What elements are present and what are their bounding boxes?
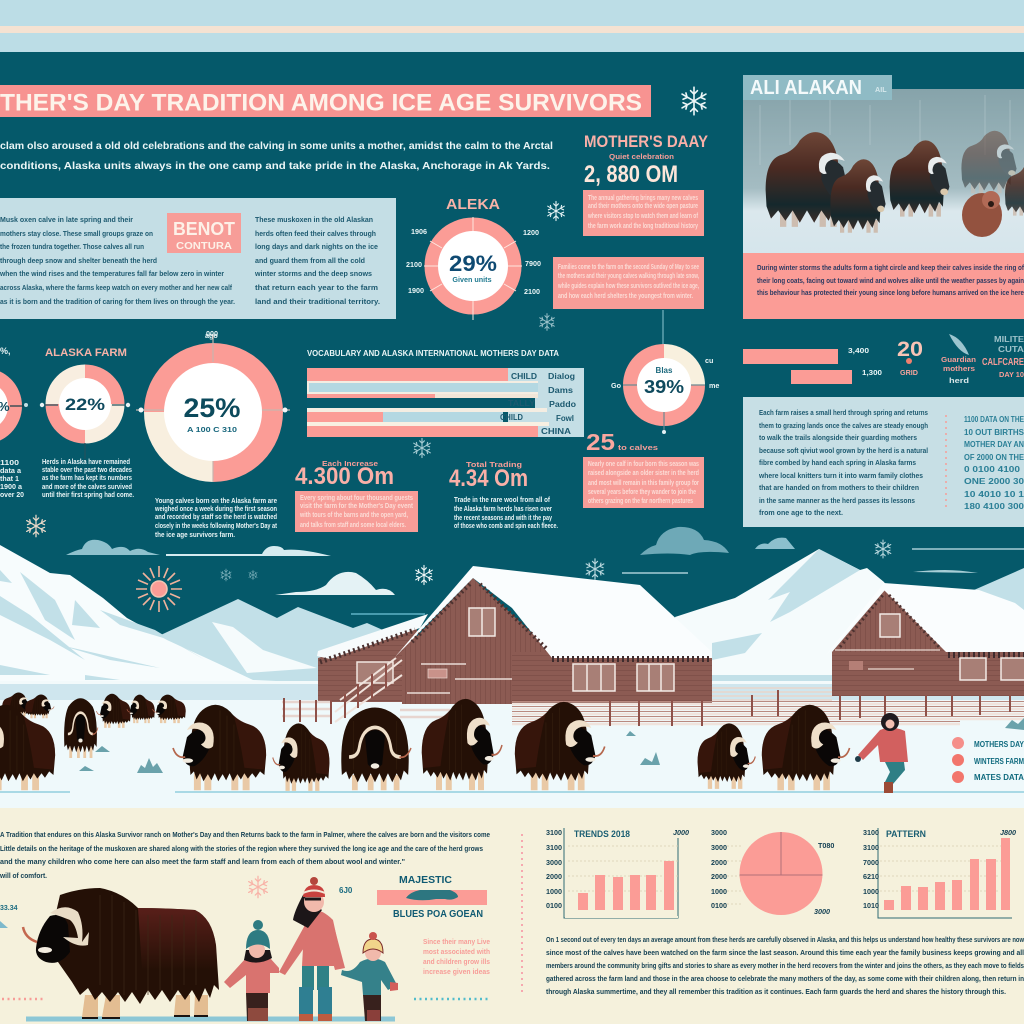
bar chart: horizontal: Dialog bbox=[548, 372, 575, 381]
bar chart: left: 0100 bbox=[546, 901, 562, 910]
shadows bbox=[0, 791, 1024, 793]
donut: Alaska Farm 22%: 22% bbox=[65, 395, 105, 414]
photo caption bbox=[743, 253, 1024, 319]
label: 33.34 bbox=[0, 905, 18, 912]
bottom intro text: A Tradition that endures on this Alaska Survivor ranch on Mother's Day and then Returns back to the farm in Palmer, where the calves are born and the visitors come bbox=[0, 830, 490, 839]
bar chart: right: 1000 bbox=[863, 887, 879, 896]
bar chart: right: 7000 bbox=[863, 858, 879, 867]
feature text: CUTA bbox=[998, 345, 1024, 354]
bar pair bbox=[743, 346, 882, 384]
panel: text with badge bbox=[0, 198, 396, 319]
stat: Mother's Day: 2, 880 OM bbox=[584, 161, 678, 188]
pie chart: T080 bbox=[818, 841, 834, 850]
bar chart: horizontal: CHILD bbox=[500, 413, 523, 422]
donut: partial left: 1100 bbox=[0, 458, 19, 467]
donut: Alaska 29%: ALEKA bbox=[446, 196, 500, 213]
callout box: with tours of the barns and the open yard, bbox=[299, 510, 408, 519]
icon: snowflake bbox=[27, 515, 45, 537]
photo title tab: AIL bbox=[875, 85, 887, 94]
top band bbox=[0, 0, 1024, 52]
panel: long text right: 10 4010 10 1 bbox=[964, 490, 1024, 499]
left column text: as it is born and the tradition of caring for them lives on through the year. bbox=[0, 297, 235, 306]
donut: Alaska 29%: 1200 bbox=[523, 228, 539, 237]
pink text: and children grow ills bbox=[423, 957, 490, 966]
pie chart: 1000 bbox=[711, 887, 727, 896]
icon: snowflake bbox=[586, 559, 604, 579]
stat: 4.34 Om: Total Trading bbox=[466, 460, 522, 469]
donut: partial left: 1900 a bbox=[0, 482, 23, 491]
callout box: the farm work and the long traditional history bbox=[588, 221, 698, 230]
window bbox=[469, 608, 674, 691]
right column text: herds often feed their calves through bbox=[255, 229, 376, 238]
donut: Alaska 29% bbox=[406, 196, 541, 320]
panel: long text right: from one age to the next. bbox=[759, 508, 843, 517]
panel: long text right: Each farm raises a small herd through spring and returns bbox=[759, 408, 928, 417]
mother bbox=[279, 877, 345, 1021]
bottom intro text: and the many children who come here can also meet the farm staff and learn from each of them about wool and winter." bbox=[0, 857, 405, 866]
feature text: MILITE bbox=[994, 335, 1024, 344]
intro text bbox=[0, 141, 553, 172]
pie chart: 0100 bbox=[711, 901, 727, 910]
pink text: most associated with bbox=[423, 947, 490, 956]
text block: Herds in Alaska have remained bbox=[42, 457, 130, 466]
callout: Majestic bbox=[377, 875, 487, 920]
panel: long text right: 10 OUT BIRTHS bbox=[964, 428, 1024, 437]
donut: 39%: cu bbox=[705, 356, 713, 365]
pie chart: 3000 bbox=[711, 843, 727, 852]
mountains bbox=[0, 545, 1024, 701]
bar chart: right: 6210 bbox=[863, 872, 879, 881]
bar chart: right: PATTERN bbox=[886, 829, 926, 839]
donut: Alaska 29%: 29% bbox=[449, 251, 497, 276]
feature text bbox=[982, 335, 1024, 379]
text block: Young calves born on the Alaska farm are bbox=[155, 496, 277, 505]
bar chart: left: 3000 bbox=[546, 858, 562, 867]
scale dots teal bbox=[414, 998, 490, 1000]
left column text: Musk oxen calve in late spring and their bbox=[0, 215, 133, 224]
pie chart: 3000 bbox=[814, 907, 830, 916]
bar chart: left: J000 bbox=[673, 828, 689, 837]
icon: snowflake bbox=[249, 876, 267, 898]
right column text: winter storms and the deep snows bbox=[254, 269, 372, 278]
stat: 25 bbox=[586, 429, 658, 455]
stat: 25: to calves bbox=[618, 445, 658, 452]
stat: Mother's Day bbox=[584, 132, 709, 188]
callout box: Every spring about four thousand guests bbox=[300, 493, 413, 502]
snow ground bbox=[0, 700, 1024, 808]
badge bbox=[167, 213, 241, 253]
donut: partial left: that 1 bbox=[0, 474, 19, 483]
stat: 20 bbox=[897, 338, 923, 377]
text block: the recent seasons and with it the pay bbox=[454, 513, 552, 522]
panel: bottom bbox=[0, 808, 1024, 1024]
callout box: where visitors stop to watch them and learn of bbox=[587, 211, 698, 220]
icon: snowflake bbox=[540, 314, 554, 330]
callout box bbox=[583, 457, 704, 508]
left column text: mothers stay close. These small groups graze on bbox=[0, 229, 153, 238]
callout box: the mothers and their young calves walking through late snow, bbox=[558, 271, 699, 280]
bar chart: left: 3100 bbox=[546, 843, 562, 852]
text block bbox=[42, 457, 134, 499]
pink text bbox=[423, 937, 490, 976]
staircase bbox=[335, 658, 402, 722]
herd: foreground oxen bbox=[0, 699, 1024, 792]
panel: long text right: ONE 2000 30 bbox=[964, 477, 1024, 486]
roof bbox=[395, 566, 712, 658]
bottom intro text bbox=[0, 830, 490, 880]
bar chart: left: 1000 bbox=[546, 887, 562, 896]
callout box: and how each herd shelters the youngest from winter. bbox=[558, 291, 693, 300]
photo bbox=[743, 89, 1024, 254]
right column text bbox=[254, 215, 380, 306]
icon: snowflake bbox=[416, 565, 432, 585]
icon: snowflake bbox=[875, 540, 891, 558]
bar chart: left: 2000 bbox=[546, 872, 562, 881]
callout box: visit the farm for the Mother's Day event bbox=[300, 501, 413, 510]
photo title tab: ALI ALAKAN bbox=[750, 77, 862, 99]
donut: Alaska 29%: 2100 bbox=[406, 260, 422, 269]
right column text: and guard them from all the cold bbox=[255, 256, 365, 265]
donut: Alaska Farm 22%: ALASKA FARM bbox=[45, 347, 127, 359]
callout box: The annual gathering brings many new calves bbox=[588, 193, 698, 202]
stat: Mother's Day: Quiet celebration bbox=[609, 152, 674, 161]
donut: 39% bbox=[611, 310, 719, 434]
bar chart: left: TRENDS 2018 bbox=[574, 829, 630, 839]
panel: long text right: in the same manner as the herd passes its lessons bbox=[759, 496, 915, 505]
mountain left bbox=[0, 545, 320, 686]
donut: Alaska 29%: 1900 bbox=[408, 286, 424, 295]
donut: 25%: 000 bbox=[206, 329, 218, 338]
stat: 4.30 Om: Each Increase bbox=[322, 459, 378, 468]
label: ago bbox=[205, 331, 218, 340]
stat: 4.30 Om: 4.300 Om bbox=[295, 463, 394, 490]
feature text: DAY 10 bbox=[999, 372, 1024, 379]
pink text: Since their many Live bbox=[423, 937, 490, 946]
icon: snowflake bbox=[249, 570, 257, 580]
child right bbox=[341, 932, 398, 1021]
person in red jacket bbox=[855, 713, 908, 793]
text block: the Alaska farm herds has risen over bbox=[454, 504, 552, 513]
feature text bbox=[941, 355, 976, 385]
bar chart: right: 3100 bbox=[863, 828, 879, 837]
donut: partial left: data a bbox=[0, 466, 22, 475]
text block: weighed once a week during the first season bbox=[154, 504, 277, 513]
pie chart: 2000 bbox=[711, 858, 727, 867]
panel: long text right: them to grazing lands once the calves are steady enough bbox=[759, 421, 928, 430]
intro text: conditions, Alaska units always in the one camp and take pride in the Alaska, Anchorage in Ak Yards. bbox=[0, 161, 550, 172]
callout box: while guides explain how these survivors outlived the ice age, bbox=[557, 281, 699, 290]
left column text: when the wind rises and the temperatures fall far below zero in winter bbox=[0, 269, 224, 278]
text block: stable over the past two decades bbox=[42, 465, 132, 474]
panel: long text right: where local knitters turn it into warm family clothes bbox=[758, 471, 923, 480]
text block: and more of the calves survived bbox=[42, 482, 132, 491]
bar chart: horizontal: CHINA bbox=[541, 427, 571, 436]
donut: partial left bbox=[0, 346, 28, 499]
donut: Alaska Farm 22% bbox=[40, 347, 130, 459]
stat: 20: 20 bbox=[897, 338, 923, 361]
right column text: land and their traditional territory. bbox=[255, 297, 380, 306]
gable bbox=[402, 578, 552, 704]
callout box: others grazing on the far northern pastures bbox=[588, 496, 693, 505]
pie chart: 2000 bbox=[711, 872, 727, 881]
icon: snowflake bbox=[682, 87, 706, 115]
icon: feather bbox=[949, 334, 969, 355]
bar chart: horizontal bbox=[307, 349, 584, 437]
panel: long text right: 180 4100 300 bbox=[964, 502, 1024, 511]
label: 6J0 bbox=[339, 886, 353, 895]
icon: snowflake bbox=[221, 569, 231, 581]
panel: Ali Alakan photo bbox=[743, 75, 1024, 319]
callout box: Families come to the farm on the second Sunday of May to see bbox=[558, 262, 699, 271]
icon: blue triangle bbox=[0, 921, 8, 928]
bar chart: horizontal: Fowl bbox=[556, 414, 574, 423]
left column text: across Alaska, where the farms keep watch on every mother and her new calf bbox=[0, 283, 233, 292]
badge: BENOT bbox=[173, 219, 235, 239]
callout box bbox=[553, 257, 704, 309]
stat: Mother's Day: MOTHER'S DAAY bbox=[584, 132, 709, 151]
donut: Alaska 29%: 1906 bbox=[411, 227, 427, 236]
legend: MATES DATA bbox=[974, 773, 1024, 782]
bar chart: right: 3100 bbox=[863, 843, 879, 852]
stat: 20: GRID bbox=[900, 368, 918, 377]
bar chart: left: 3100 bbox=[546, 828, 562, 837]
donut: partial left: over 20 bbox=[0, 490, 24, 499]
fences bbox=[282, 688, 1024, 726]
callout box bbox=[583, 190, 704, 236]
barn: main bbox=[317, 566, 712, 722]
text block: of those who comb and spin each fleece. bbox=[454, 521, 558, 530]
bar pair: 1,300 bbox=[862, 368, 882, 377]
feature text: herd bbox=[949, 376, 969, 385]
calf bbox=[962, 191, 1002, 237]
mountains behind left bbox=[150, 599, 420, 690]
bar chart: horizontal: Paddo bbox=[549, 400, 576, 409]
bar chart: right: 1010 bbox=[863, 901, 879, 910]
front bbox=[512, 652, 712, 705]
barn: right bbox=[826, 583, 1024, 696]
callout box: and their mothers onto the wide open pasture bbox=[588, 201, 698, 210]
legend bbox=[952, 737, 1024, 783]
family bbox=[224, 877, 398, 1021]
stat: 4.34 Om: 4.34 Om bbox=[449, 465, 528, 492]
donut: partial left: %, bbox=[0, 346, 11, 356]
right column text: These muskoxen in the old Alaskan bbox=[255, 215, 373, 224]
donut: 39%: 39% bbox=[644, 377, 684, 397]
intro text: clam olso aroused a old old celebrations and the calving in some units a mother, amidst the calm to the Arctal bbox=[0, 141, 553, 152]
bar chart: horizontal: TALLY bbox=[508, 399, 536, 408]
bar chart: horizontal: CHILD bbox=[511, 372, 537, 381]
pie chart: 3000 bbox=[711, 828, 727, 837]
donut: 39%: Blas bbox=[656, 366, 673, 375]
callout box: and talks from staff and some local elders. bbox=[300, 520, 406, 529]
donut: Alaska 29%: 2100 bbox=[524, 287, 540, 296]
bar chart: right bbox=[863, 828, 1016, 918]
far ground band bbox=[0, 681, 1024, 685]
mountain centre right bbox=[675, 549, 960, 690]
bar chart: horizontal: VOCABULARY AND ALASKA INTERNATIONAL MOTHERS DAY DATA bbox=[307, 349, 559, 358]
donut: 39%: Go bbox=[611, 381, 622, 390]
panel: long text right: to walk the trails alongside their guarding mothers bbox=[759, 433, 917, 442]
text block bbox=[154, 496, 277, 539]
bottom intro text: will of comfort. bbox=[0, 871, 47, 880]
badge: CONTURA bbox=[176, 241, 232, 252]
donut: 25%: A 100 C 310 bbox=[187, 425, 237, 434]
text block: until their first spring had come. bbox=[42, 490, 134, 499]
panel: long text right: 0 0100 4100 bbox=[964, 465, 1021, 474]
pie chart bbox=[711, 828, 834, 916]
donut: Alaska 29%: 7900 bbox=[525, 259, 541, 268]
feature text: mothers bbox=[943, 364, 975, 373]
stat: 25: 25 bbox=[586, 429, 615, 455]
right column text: that return each year to the farm bbox=[255, 283, 378, 292]
scale dots pink bbox=[2, 998, 45, 1000]
donut: 39%: me bbox=[709, 381, 719, 390]
donut: 25%: 25% bbox=[184, 393, 240, 423]
left column text: the frozen tundra together. Those calves all run bbox=[0, 242, 144, 251]
muskox large bbox=[23, 888, 395, 1019]
tundra shrubs bbox=[79, 718, 1024, 773]
callout box: and most will remain in this family group for bbox=[588, 478, 699, 487]
pink text: increase given ideas bbox=[423, 967, 490, 976]
text block: as the farm has kept its numbers bbox=[42, 473, 132, 482]
panel: long text right: fibre combed by hand each spring in Alaska farms bbox=[759, 458, 916, 467]
text block: closely in the weeks following Mother's Day at bbox=[155, 521, 277, 530]
right column text: long days and dark nights on the ice bbox=[255, 242, 378, 251]
mountain far right bbox=[974, 568, 1024, 620]
bar chart: left bbox=[546, 828, 689, 918]
text block: Trade in the rare wool from all of bbox=[454, 495, 551, 504]
callout: Majestic: MAJESTIC bbox=[399, 875, 452, 886]
donut: Alaska 29%: Given units bbox=[452, 275, 492, 284]
panel: long text right bbox=[743, 397, 1024, 527]
icon: snowflake bbox=[414, 438, 430, 458]
bottom right text bbox=[546, 935, 1024, 996]
child left bbox=[224, 920, 279, 1021]
title banner: THER'S DAY TRADITION AMONG ICE AGE SURVIVORS bbox=[0, 90, 642, 116]
callout box: raised alongside an older sister in the herd bbox=[588, 468, 699, 477]
panel: long text right: that are handed on from mothers to their children bbox=[759, 483, 919, 492]
callout box: Nearly one calf in four born this season was bbox=[588, 459, 699, 468]
callout box bbox=[295, 491, 418, 532]
icon: sun bbox=[136, 566, 182, 612]
panel: long text right: because soft qiviut wool grown by the herd is a natural bbox=[759, 446, 928, 455]
clouds bbox=[66, 527, 1024, 614]
text block bbox=[454, 495, 558, 530]
herd: background oxen bbox=[2, 692, 186, 758]
text block: and recorded by staff so the herd is watched bbox=[155, 512, 277, 521]
bar chart: right: J800 bbox=[1000, 828, 1016, 837]
icon: snowflake bbox=[548, 201, 564, 221]
left wing bbox=[317, 614, 428, 702]
left column text: through deep snow and shelter beneath the herd bbox=[0, 256, 157, 265]
bar chart: horizontal: Dams bbox=[548, 386, 574, 395]
text block: the ice age survivors farm. bbox=[155, 530, 235, 539]
feature text: Guardian bbox=[941, 355, 976, 364]
left column text bbox=[0, 215, 235, 306]
bottom intro text: Little details on the heritage of the muskoxen are shared along with the stories of the region where they survived the long ice age and the care of the herd grows bbox=[0, 844, 483, 853]
callout box: several years before they wander to join the bbox=[588, 487, 696, 496]
callout: Majestic: BLUES POA GOEAN bbox=[393, 909, 483, 920]
dotted divider bbox=[521, 834, 523, 994]
bar pair: 3,400 bbox=[848, 346, 869, 355]
donut: 25% bbox=[136, 329, 290, 482]
